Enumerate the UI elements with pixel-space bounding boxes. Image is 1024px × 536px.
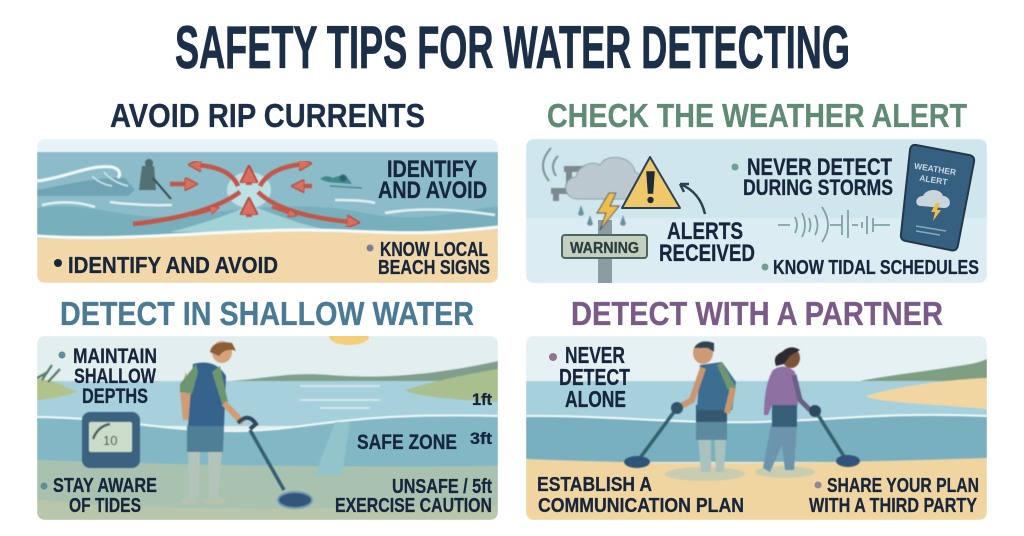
- panel background: [526, 139, 987, 283]
- bullet: never detect alone: NEVER: [565, 342, 625, 368]
- depth label: 3ft: 3ft: [470, 429, 492, 448]
- bullet: know local beach signs: [366, 239, 490, 279]
- figure: man with detector: [180, 341, 312, 508]
- label: unsafe 5ft exercise caution: [335, 476, 492, 517]
- bullet: never detect during storms: DURING STORMS: [743, 175, 893, 200]
- icon: signal tower: [543, 148, 592, 201]
- icon: diver with detector: [139, 159, 171, 199]
- figure: man with detector: [624, 341, 736, 472]
- bullet: share your plan with a third party: WITH A THIRD PARTY: [809, 495, 978, 517]
- panel: avoid rip currents: [37, 97, 498, 283]
- warning sign post: WARNING: [570, 240, 639, 257]
- bullet: stay aware of tides: STAY AWARE: [53, 475, 157, 497]
- label: unsafe 5ft exercise caution: EXERCISE CAUTION: [335, 495, 492, 517]
- bullet: share your plan with a third party: [809, 475, 979, 517]
- bullet: share your plan with a third party: SHARE YOUR PLAN: [827, 475, 979, 497]
- icon: warning triangle: [622, 157, 680, 208]
- rip current arrows: [133, 164, 352, 224]
- icon: depth gauge device: [82, 412, 140, 468]
- label: establish a communication plan: ESTABLISH A: [537, 474, 652, 496]
- bullet: never detect during storms: [732, 154, 893, 200]
- panel: detect with a partner: [526, 295, 987, 520]
- label: alerts received: ALERTS: [667, 218, 743, 245]
- bullet: know tidal schedules: KNOW TIDAL SCHEDULES: [773, 257, 979, 279]
- label: unsafe 5ft exercise caution: UNSAFE / 5ft: [392, 476, 492, 498]
- bullet: never detect alone: ALONE: [565, 386, 626, 412]
- label: identify and avoid (water): AND AVOID: [378, 177, 487, 204]
- bullet: stay aware of tides: OF TIDES: [69, 495, 141, 517]
- bullet: never detect during storms: NEVER DETECT: [747, 154, 892, 181]
- bullet: identify and avoid (beach): IDENTIFY AND AVOID: [68, 252, 278, 278]
- panel: check the weather alert: [526, 97, 987, 283]
- heading: check the weather alert: CHECK THE WEATHER ALERT: [547, 97, 967, 134]
- bullet: maintain shallow depths: SHALLOW: [74, 365, 156, 388]
- icon: storm cloud: [566, 157, 644, 230]
- bullet: never detect alone: DETECT: [559, 364, 630, 390]
- icon: phone with weather alert: WEATHER: [913, 161, 957, 177]
- label: alerts received: RECEIVED: [659, 240, 755, 267]
- warning sign post: [562, 220, 647, 283]
- bullet: maintain shallow depths: MAINTAIN: [73, 345, 157, 368]
- arrow: alert to warning: [680, 184, 705, 214]
- heading: detect with a partner: DETECT WITH A PARTNER: [571, 295, 943, 332]
- icon: phone with weather alert: ALERT: [919, 173, 949, 187]
- icon: swimmer: [320, 174, 362, 188]
- beach scene: [526, 336, 987, 520]
- depth label: 1ft: 1ft: [472, 390, 492, 409]
- heading: detect in shallow water: DETECT IN SHALLOW WATER: [60, 295, 474, 332]
- bullet: never detect alone: [549, 342, 630, 412]
- icon: signal waveform: [778, 207, 890, 242]
- label: establish a communication plan: [537, 474, 744, 517]
- icon: depth gauge device: 10: [103, 433, 117, 448]
- lake scene: [37, 329, 498, 520]
- heading: avoid rip currents: AVOID RIP CURRENTS: [110, 97, 425, 134]
- beach scene: [37, 139, 498, 283]
- label: establish a communication plan: COMMUNICATION PLAN: [538, 495, 744, 517]
- figure: woman with detector: [763, 347, 860, 472]
- label: alerts received: [659, 218, 755, 267]
- label: identify and avoid (water): IDENTIFY: [387, 156, 477, 183]
- bullet: stay aware of tides: [40, 475, 157, 517]
- bullet: know local beach signs: BEACH SIGNS: [378, 257, 490, 279]
- bullet: maintain shallow depths: [58, 345, 157, 408]
- label: identify and avoid (water): [378, 156, 487, 204]
- label: safe zone: SAFE ZONE: [357, 431, 457, 454]
- bullet: maintain shallow depths: DEPTHS: [82, 385, 148, 408]
- bullet: know local beach signs: KNOW LOCAL: [380, 239, 488, 261]
- icon: phone with weather alert: [901, 145, 974, 250]
- panel: detect in shallow water: [37, 295, 498, 520]
